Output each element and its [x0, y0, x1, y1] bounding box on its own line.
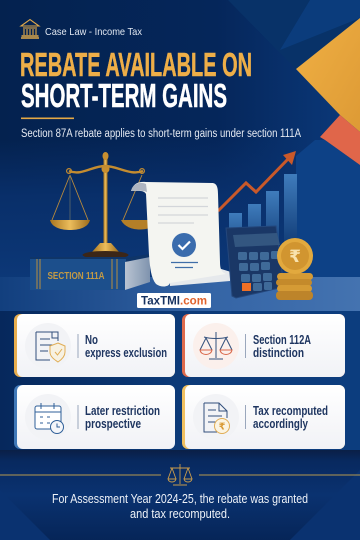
card: later restriction prospective [14, 385, 175, 449]
card: tax recomputed accordingly [182, 385, 345, 449]
footer divider with scales icon [0, 464, 360, 485]
icon: scales [200, 332, 232, 359]
card text: distinction [253, 346, 304, 360]
floor [0, 277, 360, 311]
footer text: and tax recomputed. [130, 507, 230, 521]
card text [253, 333, 311, 360]
card: no express exclusion [14, 314, 175, 377]
footer text: For Assessment Year 2024-25, the rebate was granted [52, 492, 308, 506]
card text [85, 333, 167, 360]
header label [21, 20, 143, 38]
title: SHORT-TERM GAINS [21, 77, 227, 114]
icon: calendar with clock [35, 403, 64, 434]
card text: No [85, 333, 98, 347]
card text [253, 404, 328, 431]
logo: TaxTMI.com: TaxTMI.com [141, 296, 207, 308]
title rule [21, 118, 74, 119]
badge: verified check [172, 233, 196, 257]
bar chart [229, 174, 297, 258]
coin stack [276, 238, 313, 300]
scales of justice [50, 152, 150, 259]
icon: document with rupee: ₹ [219, 422, 226, 432]
decorative triangles [296, 18, 360, 165]
document scroll [131, 182, 231, 286]
subtitle: Section 87A rebate applies to short-term gains under section 111A [21, 128, 301, 140]
card text: Section 112A [253, 333, 311, 347]
card text: Later restriction [85, 404, 160, 418]
card text: prospective [85, 417, 141, 431]
icon: rupee coin: ₹ [289, 247, 301, 267]
icon: courthouse [21, 20, 39, 38]
footer text [52, 492, 308, 521]
arrow: growth [218, 151, 296, 211]
book: section 111A: SECTION 111A [48, 270, 105, 282]
icon: document with rupee [204, 403, 230, 434]
header label: Case Law - Income Tax [45, 26, 143, 38]
card text: Tax recomputed [253, 404, 328, 418]
card text: accordingly [253, 417, 308, 431]
title [20, 46, 252, 114]
illustration [0, 151, 360, 311]
calculator [226, 226, 284, 298]
card: section 112A distinction [182, 314, 345, 377]
icon: document with shield [36, 332, 65, 362]
book: section 111A [30, 254, 150, 290]
card text: express exclusion [85, 346, 167, 360]
card text [85, 404, 160, 431]
